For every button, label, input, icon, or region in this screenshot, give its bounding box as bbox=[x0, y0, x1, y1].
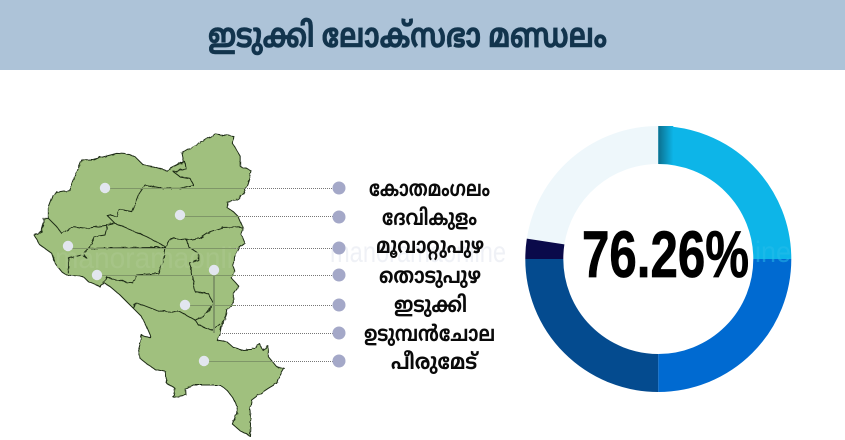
watermark: manoramaonli bbox=[55, 242, 233, 275]
legend labels: പീരുമേട് bbox=[391, 349, 480, 374]
watermark: manoramaonline bbox=[330, 236, 506, 269]
map location dots bbox=[63, 183, 219, 366]
segment: light blue bbox=[658, 145, 772, 259]
segment: dark blue bbox=[544, 259, 658, 373]
title: ഇടുക്കി ലോക്സഭാ മണ്ഡലം bbox=[208, 17, 607, 55]
map: Idukki constituency bbox=[34, 134, 284, 436]
donut chart bbox=[544, 126, 772, 373]
legend labels: മൂവാറ്റുപുഴ bbox=[376, 233, 484, 261]
assembly segment borders bbox=[48, 162, 243, 330]
header band bbox=[0, 0, 845, 70]
segment: mid blue bbox=[658, 259, 772, 373]
segment: navy sliver bbox=[544, 242, 546, 259]
legend labels bbox=[364, 176, 495, 374]
percentage value: 76.26% bbox=[582, 217, 749, 291]
leader lines bbox=[68, 188, 333, 362]
legend labels: ഇടുക്കി bbox=[394, 292, 467, 317]
segment shadow bbox=[658, 126, 673, 164]
legend labels: തൊടുപുഴ bbox=[379, 263, 481, 288]
legend labels: ദേവികുളം bbox=[382, 205, 477, 230]
donut watermark: ine bbox=[755, 236, 791, 269]
legend markers bbox=[332, 182, 346, 368]
legend labels: ഉടുമ്പൻചോല bbox=[364, 321, 495, 346]
segment: remainder bbox=[546, 145, 658, 242]
map outline bbox=[34, 134, 284, 436]
watermark bbox=[55, 236, 506, 275]
legend labels: കോതമംഗലം bbox=[369, 176, 490, 201]
